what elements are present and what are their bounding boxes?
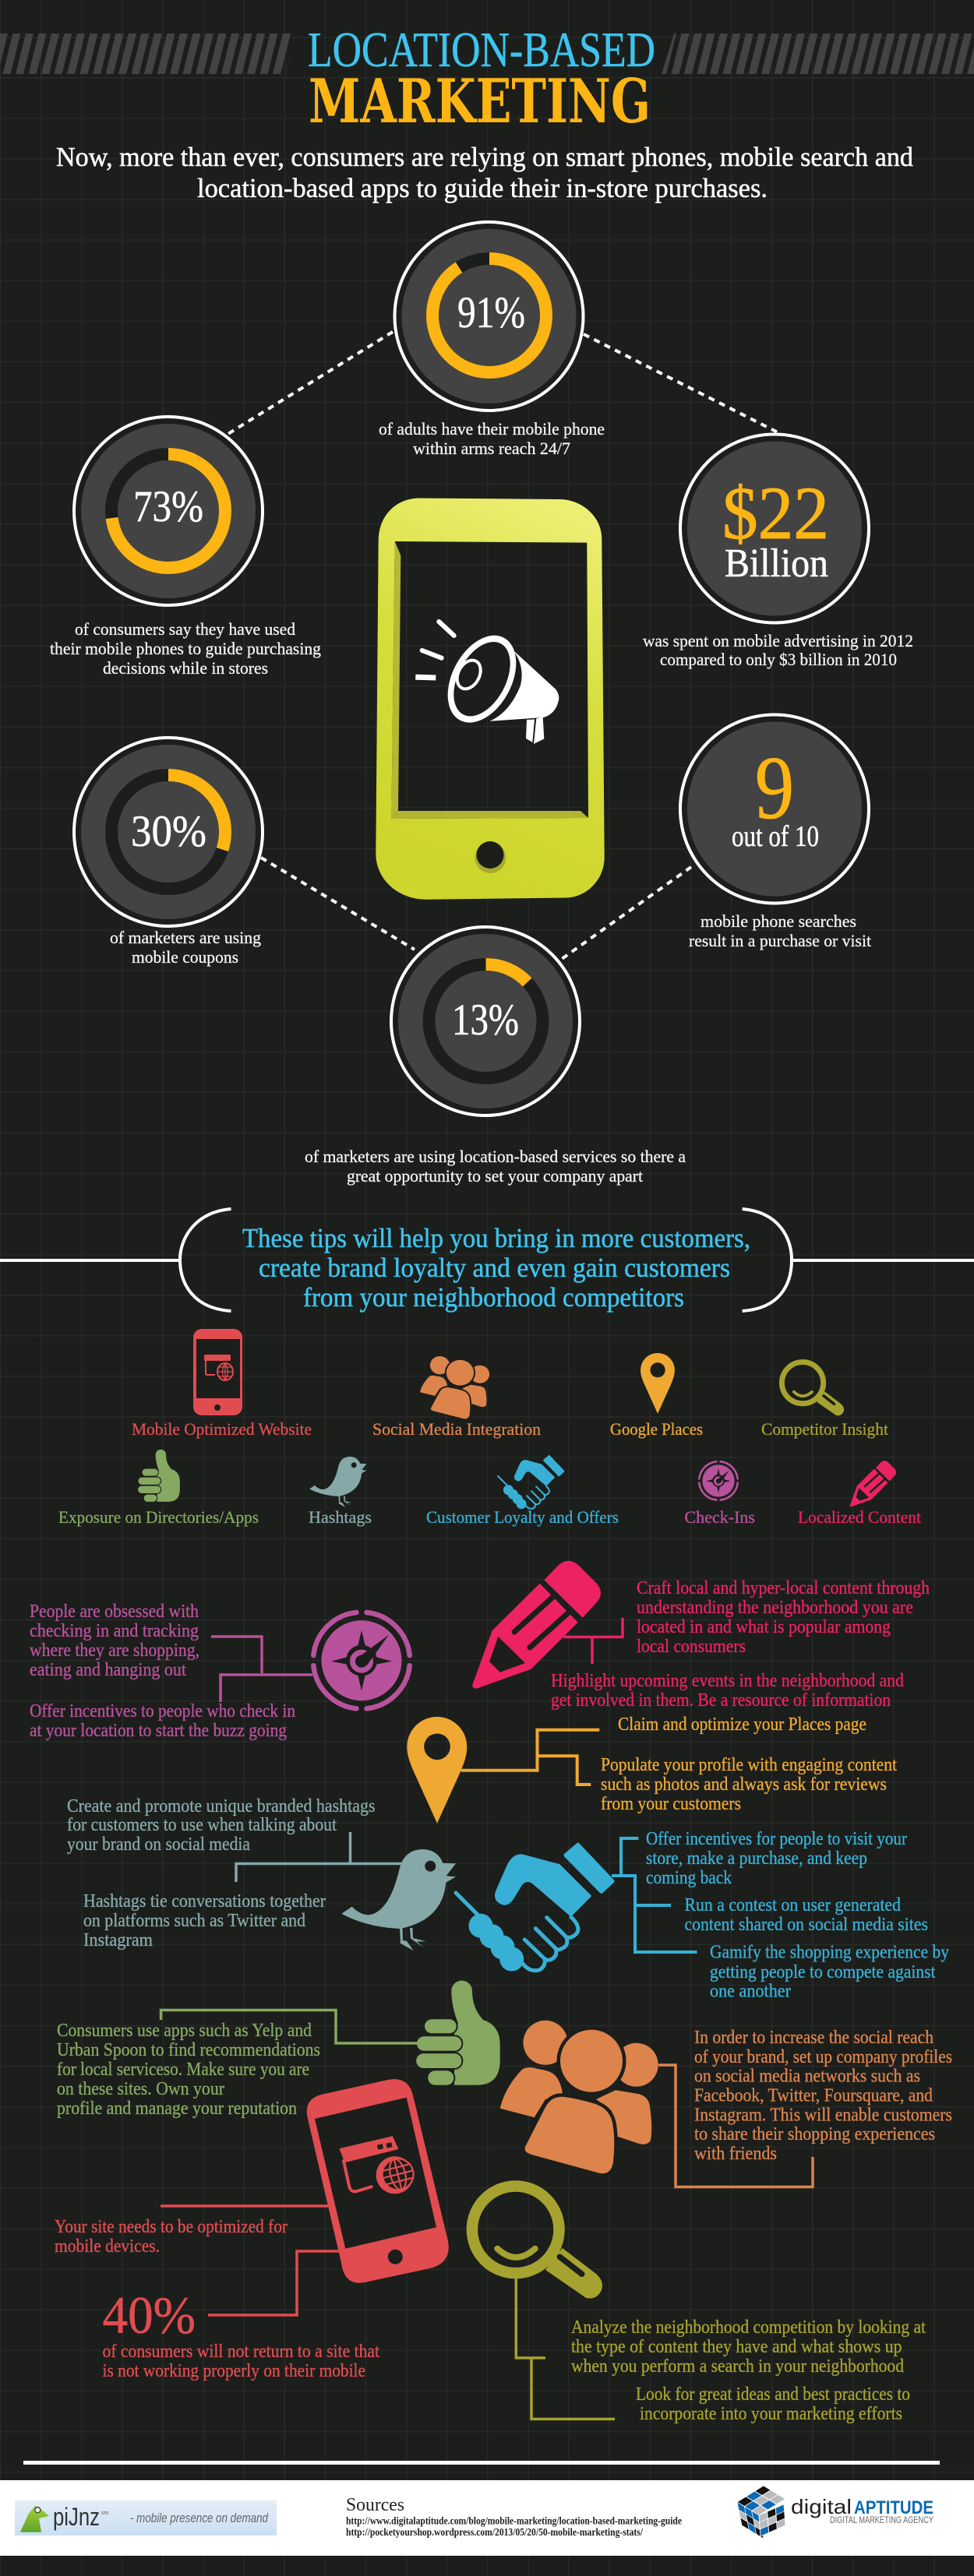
- stat: $22 Billion: $22: [722, 471, 829, 555]
- tip: Competitor Insight: [761, 1362, 888, 1439]
- logo: digital aptitude: APTITUDE: [854, 2497, 933, 2518]
- detail: competitor insight: incorporate into your marketing efforts: [640, 2404, 902, 2424]
- detail: customer loyalty: Gamify the shopping experience by: [710, 1943, 949, 1963]
- logo: digital aptitude: digital: [791, 2495, 852, 2518]
- tips banner with brackets: These tips will help you bring in more customers,: [242, 1223, 750, 1253]
- stat: 9 out of 10: mobile phone searches: [701, 911, 856, 931]
- detail: customer loyalty: one another: [710, 1982, 791, 2002]
- stat: $22 Billion: compared to only $3 billion in 2010: [660, 650, 897, 669]
- detail: competitor insight: when you perform a search in your neighborhood: [571, 2356, 904, 2377]
- intro text: Now, more than ever, consumers are relying on smart phones, mobile search and: [56, 142, 913, 172]
- stat: 9 out of 10: result in a purchase or visit: [689, 931, 871, 950]
- detail: customer loyalty: content shared on social media sites: [684, 1915, 928, 1935]
- detail: directories and apps: for local serviceso. Make sure you are: [57, 2060, 309, 2080]
- stat: 91%: 91%: [457, 288, 525, 337]
- detail: hashtags: for customers to use when talking about: [67, 1815, 337, 1835]
- sources: [346, 2495, 682, 2539]
- detail: customer loyalty: [456, 1829, 949, 2002]
- tip: Mobile Optimized Website: Mobile Optimized Website: [132, 1419, 312, 1439]
- tip: Social Media Integration: [372, 1356, 541, 1439]
- detail: hashtags: Instagram: [83, 1930, 153, 1951]
- tip: Localized Content: Localized Content: [798, 1507, 921, 1527]
- tip: Localized Content: [798, 1461, 921, 1527]
- stat: 13%: of marketers are using location-based services so there a: [305, 1147, 686, 1166]
- detail: check-ins: checking in and tracking: [30, 1621, 199, 1641]
- stat: 9 out of 10: 9: [755, 738, 794, 837]
- detail: directories and apps: Consumers use apps such as Yelp and: [57, 2021, 312, 2041]
- stat: $22 Billion: Billion: [725, 541, 828, 586]
- stat: 13%: 13%: [452, 996, 519, 1045]
- tips banner with brackets: [0, 1209, 974, 1313]
- icon: megaphone: [415, 622, 559, 744]
- detail: localized content: understanding the neighborhood you are: [637, 1598, 913, 1618]
- detail: social media: Instagram. This will enable customers: [694, 2105, 952, 2125]
- stat: 73%: 73%: [133, 482, 203, 531]
- detail: social media: with friends: [694, 2144, 777, 2164]
- detail: check-ins: at your location to start the buzz going: [30, 1721, 287, 1741]
- detail: competitor insight: Look for great ideas and best practices to: [636, 2384, 910, 2405]
- header stripes: [0, 33, 974, 74]
- detail: customer loyalty: Run a contest on user generated: [684, 1895, 901, 1915]
- detail: social media: [500, 2021, 952, 2187]
- logo: digital aptitude: DIGITAL MARKETING AGENCY: [830, 2514, 933, 2525]
- detail: competitor insight: the type of content they have and what shows up: [571, 2337, 902, 2357]
- stat: 91%: within arms reach 24/7: [413, 439, 570, 458]
- stat: 91%: of adults have their mobile phone: [379, 419, 605, 439]
- stat: 9 out of 10: out of 10: [732, 820, 819, 853]
- tip: Check-Ins: [684, 1461, 755, 1527]
- tips banner with brackets: create brand loyalty and even gain customers: [259, 1253, 730, 1283]
- tip: Customer Loyalty and Offers: Customer Loyalty and Offers: [426, 1507, 619, 1527]
- stat: $22 Billion: [643, 435, 913, 669]
- detail: social media: to share their shopping experiences: [694, 2124, 935, 2144]
- stat: 30%: mobile coupons: [132, 947, 238, 967]
- stat: 73%: decisions while in stores: [103, 658, 268, 678]
- detail: social media: on social media networks such as: [694, 2066, 920, 2086]
- logo: pijnz: sm: [101, 2511, 109, 2516]
- detail: localized content: Highlight upcoming events in the neighborhood and: [551, 1671, 904, 1691]
- detail: directories and apps: profile and manage your reputation: [57, 2099, 297, 2119]
- tip: Exposure on Directories/Apps: [58, 1450, 259, 1527]
- detail: google places: Claim and optimize your Places page: [618, 1714, 866, 1735]
- tip: Exposure on Directories/Apps: Exposure on Directories/Apps: [58, 1507, 259, 1527]
- logo: pijnz: - mobile presence on demand: [130, 2511, 268, 2525]
- detail: customer loyalty: Offer incentives for people to visit your: [646, 1829, 907, 1849]
- detail: localized content: Craft local and hyper-local content through: [637, 1578, 930, 1598]
- sources: http://www.digitalaptitude.com/blog/mobile-marketing/location-based-marketing-guide: [346, 2516, 682, 2527]
- stat: 30%: 30%: [131, 807, 206, 856]
- tips banner with brackets: from your neighborhood competitors: [303, 1282, 684, 1313]
- tip: Google Places: [610, 1353, 703, 1439]
- stat: 30%: of marketers are using: [110, 928, 261, 947]
- tip: Social Media Integration: Social Media Integration: [372, 1419, 541, 1439]
- footer band: [0, 2480, 974, 2556]
- stat: $22 Billion: was spent on mobile advertising in 2012: [643, 631, 913, 650]
- detail: mobile website: mobile devices.: [55, 2236, 160, 2257]
- logo: pijnz: piJnz: [53, 2503, 100, 2531]
- detail: customer loyalty: store, make a purchase, and keep: [646, 1848, 867, 1869]
- stat: 13%: great opportunity to set your company apart: [347, 1166, 643, 1186]
- title: [308, 22, 655, 137]
- stat: 13%: [305, 927, 686, 1186]
- detail: localized content: [472, 1561, 930, 1711]
- title: MARKETING: [309, 66, 651, 137]
- tip: Check-Ins: Check-Ins: [684, 1507, 755, 1527]
- sources: Sources: [346, 2495, 404, 2515]
- tip: Customer Loyalty and Offers: [426, 1456, 619, 1527]
- title: LOCATION-BASED: [308, 22, 655, 77]
- tip: Google Places: Google Places: [610, 1419, 703, 1439]
- detail: google places: such as photos and always ask for reviews: [601, 1774, 887, 1795]
- detail: competitor insight: [472, 2186, 926, 2424]
- detail: check-ins: eating and hanging out: [30, 1660, 186, 1680]
- detail: localized content: get involved in them. Be a resource of information: [551, 1690, 891, 1711]
- detail: check-ins: where they are shopping,: [30, 1640, 199, 1661]
- detail: mobile website: [55, 2079, 449, 2381]
- detail: mobile website: of consumers will not return to a site that: [103, 2342, 379, 2362]
- tip: Mobile Optimized Website: [132, 1329, 312, 1439]
- detail: google places: [407, 1714, 897, 1824]
- footer divider: [23, 2461, 940, 2465]
- intro text: location-based apps to guide their in-store purchases.: [197, 173, 768, 203]
- stat: 73%: of consumers say they have used: [75, 619, 295, 639]
- detail: localized content: located in and what is popular among: [637, 1617, 891, 1637]
- detail: customer loyalty: coming back: [646, 1868, 732, 1888]
- detail: hashtags: your brand on social media: [67, 1834, 250, 1855]
- detail: directories and apps: [57, 1981, 500, 2119]
- stat: 73%: their mobile phones to guide purchasing: [50, 639, 321, 658]
- stat: 73%: [50, 417, 321, 678]
- detail: social media: Facebook, Twitter, Foursquare, and: [694, 2086, 933, 2106]
- detail: check-ins: People are obsessed with: [30, 1602, 199, 1622]
- detail: google places: Populate your profile with engaging content: [601, 1755, 897, 1775]
- sources: http://pocketyourshop.wordpress.com/2013/05/20/50-mobile-marketing-stats/: [346, 2527, 644, 2539]
- intro text: [56, 142, 913, 203]
- stat: 30%: [74, 738, 263, 967]
- detail: mobile website: is not working properly on their mobile: [103, 2361, 365, 2381]
- dotted connectors: [227, 332, 779, 959]
- logo: digital aptitude: [737, 2486, 933, 2539]
- detail: hashtags: [67, 1796, 456, 1951]
- detail: check-ins: Offer incentives to people who check in: [30, 1701, 295, 1721]
- detail: competitor insight: Analyze the neighborhood competition by looking at: [571, 2317, 926, 2338]
- detail: check-ins: [30, 1602, 410, 1741]
- logo: pijnz: [15, 2500, 277, 2535]
- detail: hashtags: Create and promote unique branded hashtags: [67, 1796, 376, 1817]
- tip: Hashtags: Hashtags: [309, 1507, 372, 1527]
- detail: mobile website: 40%: [103, 2285, 196, 2345]
- detail: social media: In order to increase the social reach: [694, 2028, 933, 2048]
- tip: Competitor Insight: Competitor Insight: [761, 1419, 888, 1439]
- tip: Hashtags: [309, 1457, 372, 1527]
- detail: hashtags: on platforms such as Twitter and: [83, 1911, 305, 1931]
- detail: directories and apps: on these sites. Own your: [57, 2079, 224, 2099]
- detail: mobile website: Your site needs to be optimized for: [55, 2217, 288, 2237]
- detail: customer loyalty: getting people to compete against: [710, 1962, 936, 1982]
- detail: localized content: local consumers: [637, 1637, 746, 1657]
- detail: google places: from your customers: [601, 1794, 741, 1814]
- stat: 91%: [379, 222, 605, 458]
- detail: directories and apps: Urban Spoon to find recommendations: [57, 2040, 320, 2060]
- stat: 9 out of 10: [680, 715, 871, 950]
- icon: tilted phone: [307, 2079, 449, 2283]
- icon: cube: [737, 2486, 785, 2539]
- detail: hashtags: Hashtags tie conversations together: [83, 1891, 326, 1912]
- central phone with megaphone: [376, 499, 605, 900]
